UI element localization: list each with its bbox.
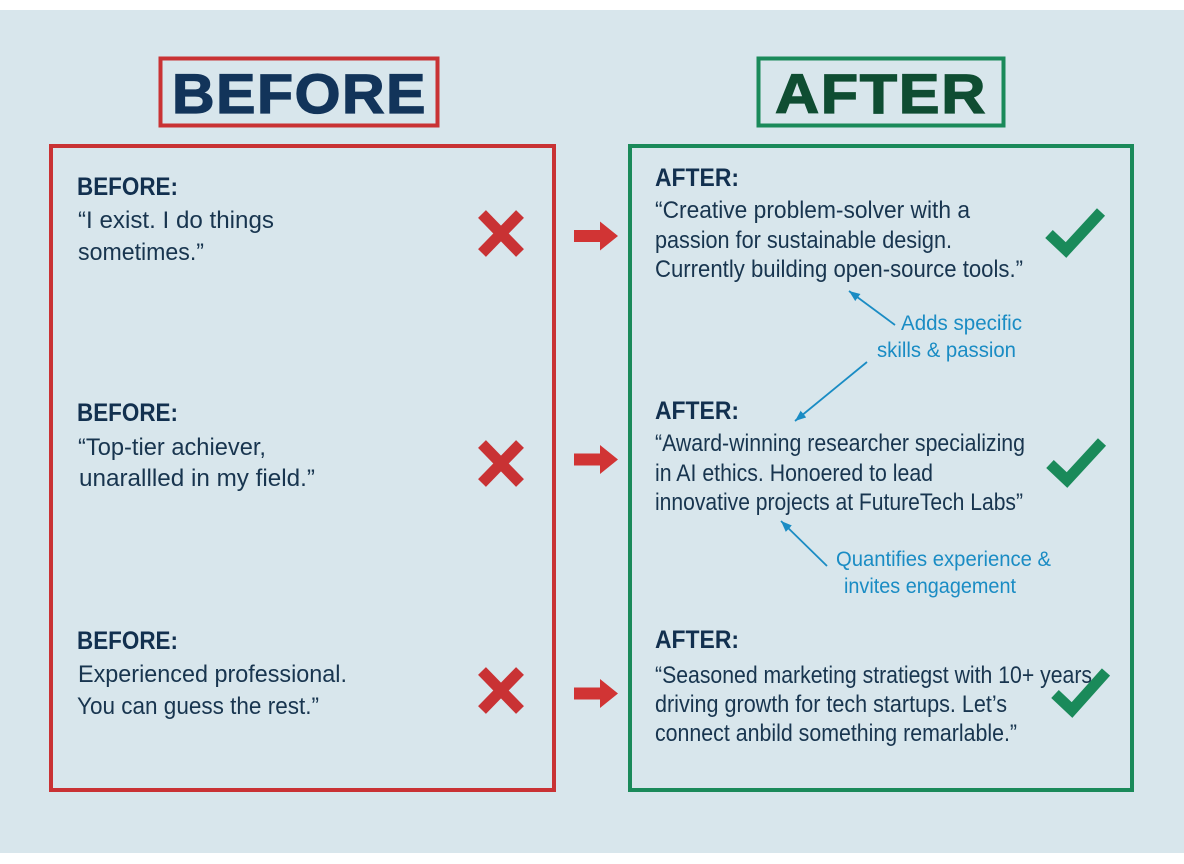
- arrow: red 2: [574, 445, 618, 474]
- after example 2: “Award-winning researcher specializing: [655, 430, 1025, 457]
- annotation: quantifies experience and invites engagement: [781, 521, 1051, 598]
- before example 3: Experienced professional.: [78, 661, 347, 688]
- after example 2: [655, 397, 1025, 516]
- after example 3: “Seasoned marketing stratiegst with 10+ years: [655, 662, 1092, 689]
- after example 2: AFTER:: [655, 397, 739, 425]
- before example 3: You can guess the rest.”: [77, 693, 319, 720]
- panel: after: [630, 146, 1132, 790]
- annotation: quantifies experience and invites engagement: invites engagement: [844, 574, 1016, 598]
- annotation: adds specific skills and passion: [795, 291, 1022, 421]
- after example 3: connect anbild something remarlable.”: [655, 720, 1017, 747]
- after example 1: [655, 164, 1023, 283]
- before example 2: [77, 399, 315, 492]
- heading: after: AFTER: [775, 62, 987, 125]
- arrow: red 3: [574, 679, 618, 708]
- after example 3: driving growth for tech startups. Let’s: [655, 691, 1007, 718]
- after example 1: AFTER:: [655, 164, 739, 192]
- before example 3: BEFORE:: [77, 627, 178, 655]
- icon: red cross 3: [482, 671, 520, 710]
- after example 2: innovative projects at FutureTech Labs”: [655, 489, 1023, 516]
- before example 2: unarallled in my field.”: [79, 465, 315, 492]
- before example 2: BEFORE:: [77, 399, 178, 427]
- arrow: red 1: [574, 222, 618, 250]
- heading: before: BEFORE: [172, 62, 427, 125]
- before example 1: “I exist. I do things: [78, 207, 274, 234]
- icon: green check 3: [1055, 672, 1106, 710]
- before example 1: sometimes.”: [78, 239, 204, 266]
- icon: red cross 2: [482, 444, 520, 483]
- before example 3: [77, 627, 347, 720]
- annotation: adds specific skills and passion: Adds specific: [901, 311, 1022, 335]
- annotation: adds specific skills and passion: skills & passion: [877, 338, 1016, 362]
- after example 1: Currently building open-source tools.”: [655, 256, 1023, 283]
- icon: green check 2: [1050, 442, 1102, 480]
- after example 1: passion for sustainable design.: [655, 227, 952, 254]
- before example 2: “Top-tier achiever,: [78, 434, 266, 461]
- before example 1: [77, 173, 274, 266]
- before example 1: BEFORE:: [77, 173, 178, 201]
- annotation: quantifies experience and invites engagement: Quantifies experience &: [836, 547, 1051, 571]
- icon: green check 1: [1049, 212, 1101, 250]
- panel: before: [51, 146, 554, 790]
- after example 2: in AI ethics. Honoered to lead: [655, 460, 933, 487]
- after example 1: “Creative problem-solver with a: [655, 197, 971, 224]
- icon: red cross 1: [482, 214, 520, 253]
- after example 3: [655, 626, 1092, 747]
- after example 3: AFTER:: [655, 626, 739, 654]
